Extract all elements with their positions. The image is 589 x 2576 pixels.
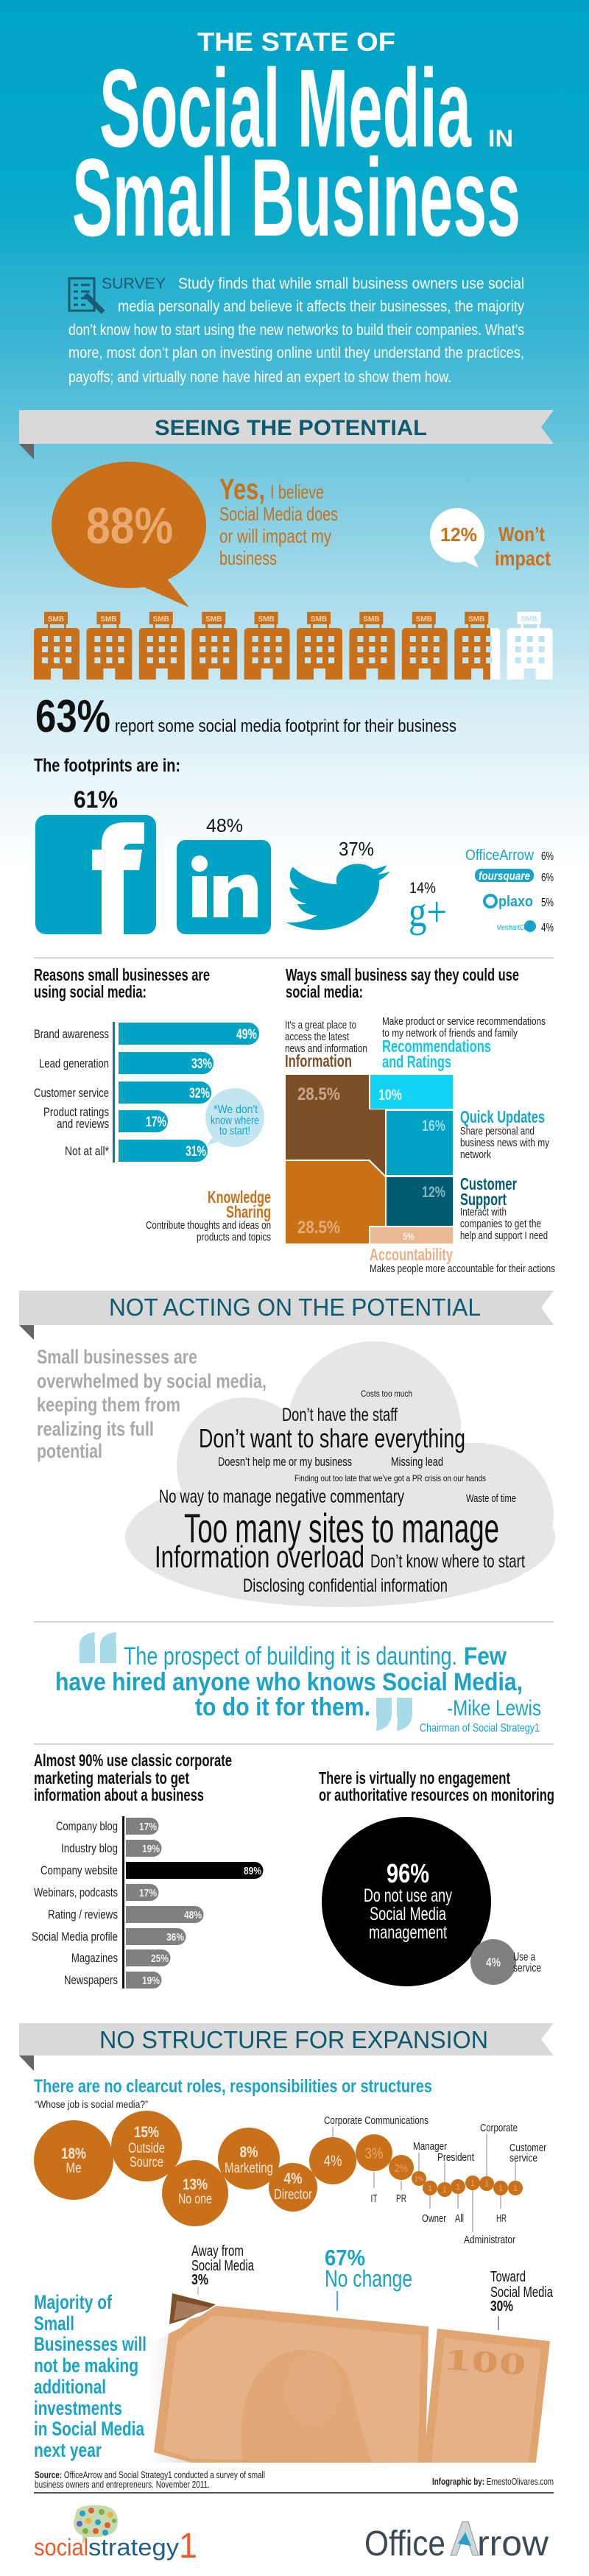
icon: twitter 37% bbox=[286, 838, 390, 930]
text: majority of small businesses: investments bbox=[34, 2397, 122, 2419]
heading: classic marketing: marketing materials to get bbox=[34, 1768, 189, 1788]
word cloud bbox=[125, 1341, 555, 1607]
bar chart: reasons: 32% bbox=[189, 1086, 210, 1101]
label: away from social media 3%: Social Media bbox=[191, 2258, 255, 2274]
banner: no structure for expansion bbox=[19, 2023, 554, 2071]
source note bbox=[35, 2469, 265, 2490]
quote: mike lewis: -Mike Lewis bbox=[447, 1696, 541, 1721]
callout: we don't know where to start: *We don't bbox=[214, 1104, 258, 1116]
speech bubble: 88% bbox=[52, 462, 206, 607]
bubble chart: whose job: service bbox=[509, 2152, 537, 2164]
word cloud: Don’t want to share everything bbox=[199, 1423, 465, 1453]
buildings row: 88% vs 12%: SMB bbox=[205, 615, 222, 624]
treemap: ways to use social media: 5% bbox=[403, 1230, 415, 1242]
heading: classic marketing bbox=[34, 1751, 232, 1804]
intro paragraph bbox=[68, 275, 524, 386]
logo: officearrow: Office bbox=[364, 2524, 445, 2563]
text: majority of small businesses: not be making bbox=[34, 2354, 138, 2376]
heading: reasons bbox=[34, 965, 210, 1001]
treemap: ways to use social media: 10% bbox=[378, 1087, 402, 1104]
icon: survey clipboard bbox=[69, 278, 103, 312]
text: quick updates: network bbox=[460, 1148, 491, 1161]
bubble chart: whose job: 1 bbox=[442, 2186, 447, 2195]
bubble chart: whose job: Owner bbox=[422, 2212, 446, 2225]
bar chart: reasons: 33% bbox=[191, 1056, 212, 1072]
bubble chart: whose job: 1 bbox=[456, 2183, 460, 2192]
text: customer support: Customer bbox=[460, 1174, 517, 1193]
text: customer support: Support bbox=[460, 1190, 507, 1209]
source note: business owners and entrepreneurs. November 2011. bbox=[35, 2479, 210, 2490]
logo: officearrow bbox=[364, 2522, 549, 2563]
logo: socialstrategy1 bbox=[34, 2505, 197, 2566]
label: 67% no change bbox=[325, 2245, 412, 2311]
callout: we don't know where to start: to start! bbox=[219, 1125, 250, 1137]
bar chart: information sources: 17% bbox=[139, 1821, 157, 1833]
bubble chart: whose job: Marketing bbox=[225, 2161, 273, 2176]
circle chart: 96% no management: 96% bbox=[387, 1858, 429, 1888]
illustration: torn dollar bill: 100 bbox=[442, 2343, 527, 2382]
bar chart: information sources: Newspapers bbox=[64, 1973, 118, 1987]
bubble chart: whose job: President bbox=[437, 2151, 475, 2164]
text: knowledge sharing: products and topics bbox=[197, 1231, 271, 1243]
bar chart: information sources: Social Media profile bbox=[32, 1930, 118, 1944]
buildings row: 88% vs 12%: SMB bbox=[416, 615, 432, 624]
text: yes believe: I believe bbox=[270, 481, 324, 503]
bar chart: information sources: Industry blog bbox=[61, 1841, 118, 1855]
buildings row: 88% vs 12%: SMB bbox=[100, 615, 117, 624]
bar chart: information sources: 17% bbox=[139, 1887, 157, 1899]
speech bubble: 12% won't impact bbox=[430, 508, 551, 570]
text: majority of small businesses: additional bbox=[34, 2376, 106, 2398]
text: recommendations bbox=[382, 1015, 546, 1071]
credit: Infographic by: ErnestoOlivares.com bbox=[432, 2476, 554, 2487]
text: customer support: companies to get the bbox=[460, 1218, 541, 1230]
heading: ways bbox=[286, 965, 519, 1001]
stat: 63% footprint: 63% bbox=[35, 691, 110, 742]
speech bubble: 88%: 88% bbox=[86, 497, 173, 554]
text: information: access the latest bbox=[285, 1031, 350, 1043]
bar chart: reasons: and reviews bbox=[57, 1117, 109, 1131]
banner: not acting on the potential: NOT ACTING ON THE POTENTIAL bbox=[109, 1294, 481, 1321]
bubble chart: whose job: No one bbox=[178, 2192, 212, 2207]
circle chart: 96% no management: Do not use any bbox=[364, 1885, 452, 1906]
bar chart: reasons: Not at all* bbox=[65, 1144, 109, 1158]
circle chart: 96% no management bbox=[322, 1817, 541, 1986]
buildings row: 88% vs 12%: SMB bbox=[48, 615, 64, 624]
intro paragraph: Study finds that while small business owners use social bbox=[178, 275, 524, 292]
bubble chart: whose job: 18% bbox=[61, 2145, 86, 2162]
quote: mike lewis: have hired anyone who knows Social Media, bbox=[55, 1668, 523, 1696]
bar chart: information sources: Magazines bbox=[71, 1951, 118, 1965]
logo: officearrow: rrow bbox=[477, 2524, 549, 2563]
text: quick updates: Quick Updates bbox=[460, 1107, 545, 1126]
heading: no clearcut roles: There are no clearcut roles, responsibilities or structures bbox=[34, 2076, 432, 2097]
text: information: It's a great place to bbox=[285, 1019, 356, 1031]
list: other networks: 5% bbox=[541, 897, 554, 909]
text: majority of small businesses: Majority of bbox=[34, 2291, 113, 2313]
buildings row: 88% vs 12%: SMB bbox=[258, 615, 275, 624]
bubble chart: whose job: 1 bbox=[428, 2184, 432, 2193]
intro paragraph: payoffs; and virtually none have hired an expert to show them how. bbox=[68, 369, 451, 386]
speech bubble: 12% won't impact: Won’t bbox=[498, 523, 545, 546]
text: majority of small businesses: Small bbox=[34, 2312, 74, 2335]
list: other networks: plaxo bbox=[498, 894, 533, 910]
quote: mike lewis: Chairman of Social Strategy1 bbox=[420, 1722, 540, 1735]
icon: google plus 14%: g+ bbox=[409, 888, 447, 936]
bubble chart: whose job: 13% bbox=[183, 2176, 208, 2193]
text: information: Information bbox=[285, 1051, 352, 1070]
title: THE STATE OF bbox=[197, 28, 395, 57]
buildings row: 88% vs 12% bbox=[34, 612, 553, 680]
treemap: ways to use social media: 12% bbox=[422, 1184, 445, 1201]
text: yes believe: Yes, bbox=[219, 473, 265, 506]
text: accountability: Accountability bbox=[370, 1245, 453, 1264]
heading: ways: social media: bbox=[286, 982, 363, 1001]
list: other networks: foursquare bbox=[479, 870, 530, 883]
text: knowledge sharing: Sharing bbox=[226, 1202, 271, 1221]
bubble chart: whose job: PR bbox=[396, 2192, 406, 2205]
bubble chart: whose job: 2% bbox=[395, 2162, 408, 2175]
icon: linkedin 48%: 48% bbox=[206, 816, 243, 836]
bar chart: information sources: Webinars, podcasts bbox=[34, 1885, 118, 1899]
title: IN bbox=[488, 125, 513, 152]
text: majority of small businesses: in Social Media bbox=[34, 2418, 145, 2440]
treemap: ways to use social media: 28.5% bbox=[297, 1084, 340, 1104]
bar chart: reasons: Brand awareness bbox=[34, 1027, 109, 1041]
bubble chart: whose job: Director bbox=[274, 2187, 313, 2203]
text: quick updates: business news with my bbox=[460, 1137, 549, 1149]
bubble chart: whose job: IT bbox=[371, 2192, 377, 2205]
text: knowledge sharing bbox=[146, 1188, 271, 1243]
list: other networks: 6% bbox=[541, 872, 554, 884]
bar chart: reasons: 31% bbox=[186, 1144, 206, 1160]
bubble chart: whose job: Manager bbox=[413, 2140, 447, 2153]
word cloud: Don’t know where to start bbox=[370, 1551, 525, 1572]
heading: no clearcut roles bbox=[34, 2076, 432, 2110]
label: away from social media 3%: Away from bbox=[191, 2243, 244, 2259]
treemap: ways to use social media: 16% bbox=[422, 1118, 445, 1135]
bar chart: information sources: 48% bbox=[184, 1909, 202, 1922]
list: other networks: OfficeArrow bbox=[465, 847, 534, 864]
bubble chart: whose job: Me bbox=[66, 2161, 81, 2176]
word cloud: Waste of time bbox=[466, 1492, 516, 1505]
quote: mike lewis bbox=[55, 1632, 541, 1735]
bubble chart: whose job: 1 bbox=[498, 2184, 503, 2193]
word cloud: Doesn’t help me or my business bbox=[218, 1455, 352, 1469]
circle chart: 96% no management: Social Media bbox=[370, 1904, 446, 1924]
circle chart: 96% no management: Use a bbox=[513, 1951, 535, 1963]
bubble chart: whose job: 4% bbox=[284, 2170, 303, 2187]
bubble chart: whose job: 1 bbox=[484, 2180, 489, 2189]
text: quick updates bbox=[460, 1107, 549, 1161]
text: recommendations: to my network of friends and family bbox=[382, 1027, 518, 1040]
intro paragraph: more, most don’t plan on investing online until they understand the practices, bbox=[68, 345, 524, 361]
bar chart: reasons: Product ratings bbox=[43, 1105, 109, 1119]
heading: no clearcut roles: “Whose job is social media?” bbox=[35, 2098, 148, 2110]
word cloud: Missing lead bbox=[391, 1455, 443, 1469]
text: recommendations: Recommendations bbox=[382, 1037, 491, 1056]
bubble chart: whose job: 1 bbox=[470, 2179, 475, 2188]
icon: twitter 37%: 37% bbox=[339, 838, 374, 860]
buildings row: 88% vs 12%: SMB bbox=[468, 615, 484, 624]
icon: linkedin 48% bbox=[177, 816, 271, 934]
treemap: ways to use social media bbox=[286, 1075, 453, 1243]
text: recommendations: Make product or service recommendations bbox=[382, 1015, 546, 1028]
banner: seeing the potential: SEEING THE POTENTIAL bbox=[155, 416, 427, 440]
icon: facebook 61% bbox=[35, 786, 156, 934]
bar chart: information sources: 19% bbox=[142, 1975, 160, 1987]
logo: socialstrategy1: 1 bbox=[179, 2527, 197, 2566]
text: quick updates: Share personal and bbox=[460, 1125, 535, 1137]
callout: we don't know where to start bbox=[205, 1088, 264, 1147]
bar chart: information sources: Rating / reviews bbox=[48, 1908, 118, 1922]
text: majority of small businesses: Businesses will bbox=[34, 2333, 147, 2355]
word cloud: Disclosing confidential information bbox=[243, 1575, 448, 1596]
quote: mike lewis: The prospect of building it is daunting. bbox=[124, 1642, 457, 1670]
bar chart: reasons: 17% bbox=[146, 1115, 166, 1130]
bar chart: reasons: 49% bbox=[236, 1027, 257, 1042]
buildings row: 88% vs 12%: SMB bbox=[521, 615, 537, 624]
banner: no structure for expansion: NO STRUCTURE FOR EXPANSION bbox=[99, 2026, 488, 2053]
text: yes believe: Social Media does bbox=[219, 503, 338, 525]
circle chart: 96% no management: service bbox=[513, 1962, 541, 1975]
bubble chart: whose job bbox=[34, 2111, 546, 2246]
word cloud: Finding out too late that we’ve got a PR crisis on our hands bbox=[294, 1473, 486, 1483]
text: knowledge sharing: Contribute thoughts and ideas on bbox=[146, 1219, 271, 1232]
bubble chart: whose job: 3% bbox=[365, 2145, 383, 2162]
label: toward social media 30% bbox=[490, 2269, 554, 2330]
heading: reasons: Reasons small businesses are bbox=[34, 965, 210, 984]
text: overwhelmed: Small businesses are bbox=[37, 1346, 197, 1368]
bar chart: information sources: 36% bbox=[166, 1931, 184, 1944]
quote: mike lewis: Few bbox=[464, 1642, 507, 1670]
label: 67% no change: No change bbox=[325, 2265, 412, 2292]
bar chart: reasons bbox=[34, 1022, 259, 1162]
bar chart: information sources: 89% bbox=[244, 1865, 261, 1877]
text: yes believe: business bbox=[219, 547, 277, 569]
bar chart: information sources: Company blog bbox=[56, 1819, 118, 1833]
text: customer support: Interact with bbox=[460, 1206, 507, 1218]
title bbox=[72, 28, 521, 259]
heading: classic marketing: information about a business bbox=[34, 1785, 204, 1804]
list: other networks: 4% bbox=[541, 922, 554, 934]
logo: socialstrategy1: social bbox=[34, 2534, 88, 2561]
bubble chart: whose job: 1 bbox=[513, 2184, 518, 2193]
heading: classic marketing: Almost 90% use classic corporate bbox=[34, 1751, 232, 1770]
list: other networks bbox=[465, 847, 554, 934]
text: customer support: help and support I need bbox=[460, 1229, 548, 1242]
icon: google plus 14%: 14% bbox=[409, 880, 436, 897]
list: other networks: 6% bbox=[541, 850, 554, 863]
word cloud: Costs too much bbox=[361, 1388, 412, 1399]
heading: footprints: The footprints are in: bbox=[34, 755, 180, 776]
text: overwhelmed: potential bbox=[37, 1440, 102, 1462]
icon: facebook 61%: 61% bbox=[74, 786, 118, 813]
heading: no engagement bbox=[319, 1768, 554, 1804]
bar chart: reasons: Customer service bbox=[34, 1086, 109, 1100]
text: information bbox=[285, 1019, 367, 1070]
bubble chart: whose job: Administrator bbox=[464, 2234, 515, 2246]
text: majority of small businesses bbox=[34, 2291, 147, 2461]
speech bubble: 12% won't impact: 12% bbox=[440, 523, 477, 546]
circle chart: 96% no management: management bbox=[369, 1922, 447, 1943]
speech bubble: 12% won't impact: impact bbox=[495, 547, 551, 570]
bubble chart: whose job: 1% bbox=[415, 2176, 423, 2184]
intro paragraph: SURVEY bbox=[102, 275, 166, 292]
bar chart: information sources: Company website bbox=[40, 1863, 118, 1877]
treemap: ways to use social media: 28.5% bbox=[297, 1218, 340, 1238]
text: information: news and information bbox=[285, 1042, 367, 1055]
circle chart: 96% no management: 4% bbox=[486, 1955, 501, 1969]
stat: 63% footprint bbox=[35, 691, 456, 742]
word cloud: No way to manage negative commentary bbox=[159, 1486, 404, 1507]
bubble chart: whose job: Customer bbox=[509, 2142, 546, 2154]
label: toward social media 30%: Social Media bbox=[490, 2284, 554, 2301]
buildings row: 88% vs 12%: SMB bbox=[153, 615, 169, 624]
text: customer support bbox=[460, 1174, 548, 1242]
bubble chart: whose job: 15% bbox=[134, 2124, 159, 2141]
text: overwhelmed: overwhelmed by social media, bbox=[37, 1370, 267, 1392]
callout: we don't know where to start: know where bbox=[211, 1115, 259, 1127]
banner: not acting on the potential bbox=[19, 1291, 554, 1340]
bar chart: information sources: 19% bbox=[142, 1843, 160, 1855]
text: overwhelmed: realizing its full bbox=[37, 1418, 154, 1440]
label: toward social media 30%: Toward bbox=[490, 2269, 526, 2285]
bar chart: information sources bbox=[32, 1816, 264, 1989]
banner: seeing the potential bbox=[19, 410, 554, 459]
bubble chart: whose job: HR bbox=[496, 2212, 507, 2225]
source note: Source: OfficeArrow and Social Strategy1 conducted a survey of small bbox=[35, 2469, 265, 2480]
illustration: torn dollar bill bbox=[149, 2293, 550, 2463]
bubble chart: whose job: Corporate Communications bbox=[324, 2114, 428, 2127]
text: recommendations: and Ratings bbox=[382, 1052, 451, 1071]
stat: 63% footprint: report some social media footprint for their business bbox=[115, 716, 456, 736]
heading: reasons: using social media: bbox=[34, 982, 147, 1001]
buildings row: 88% vs 12%: SMB bbox=[363, 615, 380, 624]
text: knowledge sharing: Knowledge bbox=[208, 1188, 271, 1207]
text: overwhelmed bbox=[37, 1346, 267, 1462]
quote: mike lewis: to do it for them. bbox=[195, 1693, 370, 1721]
intro paragraph: media personally and believe it affects their businesses, the majority bbox=[118, 298, 524, 315]
list: other networks: MerchantCircle bbox=[497, 924, 534, 932]
word cloud: Information overload bbox=[155, 1539, 364, 1574]
bubble chart: whose job: All bbox=[455, 2212, 464, 2225]
bubble chart: whose job: Outside bbox=[128, 2141, 165, 2156]
text: yes believe bbox=[219, 473, 338, 569]
buildings row: 88% vs 12%: SMB bbox=[311, 615, 327, 624]
text: majority of small businesses: next year bbox=[34, 2439, 102, 2461]
label: 67% no change: 67% bbox=[325, 2245, 365, 2270]
label: away from social media 3% bbox=[191, 2243, 255, 2295]
text: overwhelmed: keeping them from bbox=[37, 1394, 180, 1416]
logo: socialstrategy1: strategy bbox=[88, 2534, 179, 2561]
label: away from social media 3%: 3% bbox=[191, 2272, 208, 2288]
bubble chart: whose job: Source bbox=[130, 2155, 163, 2170]
text: accountability bbox=[370, 1245, 555, 1275]
bar chart: information sources: 25% bbox=[151, 1952, 169, 1965]
bar chart: reasons: Lead generation bbox=[39, 1056, 109, 1070]
heading: no engagement: There is virtually no engagement bbox=[319, 1768, 510, 1788]
bubble chart: whose job: 8% bbox=[240, 2144, 258, 2161]
text: yes believe: or will impact my bbox=[219, 525, 331, 547]
bubble chart: whose job: 4% bbox=[324, 2153, 342, 2170]
label: toward social media 30%: 30% bbox=[490, 2298, 513, 2315]
bubble chart: whose job: Corporate bbox=[480, 2122, 518, 2134]
word cloud: Don’t have the staff bbox=[282, 1405, 398, 1425]
